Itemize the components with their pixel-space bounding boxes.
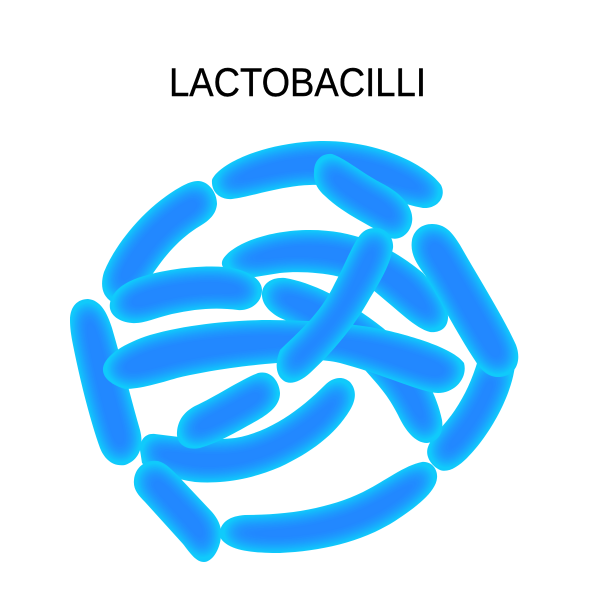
title: LACTOBACILLI [169, 61, 426, 105]
bacterium: bottom left rod [134, 461, 221, 562]
bacterium: upper left rod [102, 181, 217, 302]
bacterium: upper middle arc [222, 230, 448, 332]
bacterium: top arc rod [212, 141, 443, 208]
bacterium: left horizontal rod [110, 267, 262, 323]
bacterium: long central horizontal rod [103, 320, 465, 393]
bacterium: diagonal rod on top [277, 228, 393, 383]
bacterium: far left rod [70, 299, 141, 465]
bacterium: small central rod [177, 372, 280, 449]
bacterium: short rod over top arc [314, 154, 412, 239]
bacterium: lower right rod [427, 360, 515, 471]
bacterium: central curved rod behind [262, 278, 442, 443]
bacterium: bottom long rod [220, 462, 437, 553]
illustration: lactobacilli cluster [70, 141, 518, 562]
bacterium: right rod [412, 224, 518, 377]
bacterium: lower curved rod [140, 378, 355, 482]
